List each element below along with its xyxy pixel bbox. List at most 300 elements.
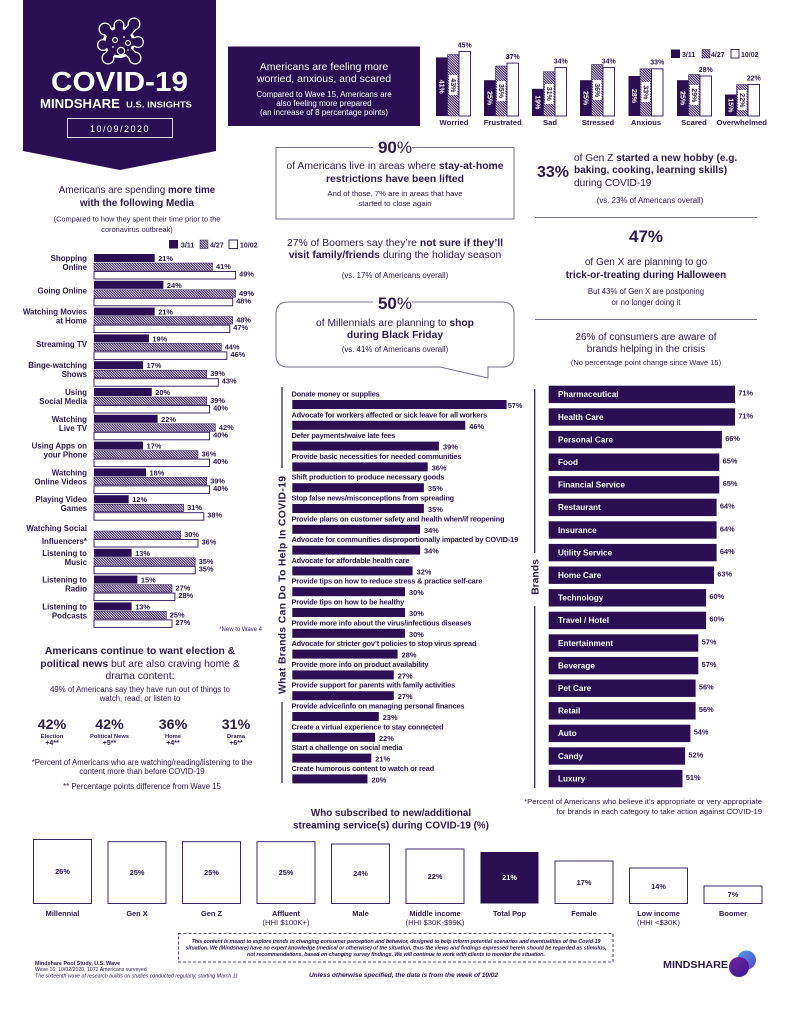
- heading: streaming: Who subscribed to new/additional: [311, 808, 471, 819]
- date box: 10/09/2020: [90, 124, 150, 134]
- axis title: What Brands Can Do To Help In COVID-19: [278, 476, 288, 694]
- row: parents: Provide support for parents with family activities: [292, 681, 455, 690]
- item: total pop: Total Pop: [493, 909, 527, 918]
- group: stressed: [580, 58, 617, 127]
- panel: election and political news: 49% of Americans say they have run out of things to: [50, 685, 231, 694]
- row: shopping online: Online: [62, 263, 88, 272]
- item: middle income: [406, 849, 465, 927]
- row: streaming tv: 19%: [152, 334, 168, 343]
- heading: streaming: streaming service(s) during COVID-19 (%): [293, 820, 489, 832]
- legend: 3/11: [682, 52, 695, 59]
- group: sad: 31%: [545, 87, 552, 102]
- footnotes: ** Percentage points difference from Wave 15: [63, 782, 222, 791]
- item: gen x: Gen X: [126, 909, 148, 918]
- row: video games: 38%: [207, 511, 223, 520]
- panel: 50 percent speech bubble: during Black Friday: [347, 330, 443, 341]
- disclaimer box: not recommendations, based on changing survey findings. We will continue to work with clients to monitor the situation.: [247, 952, 546, 958]
- bar chart: media time: [23, 240, 263, 633]
- panel: feelings message: Compared to Wave 15, Americans are: [256, 90, 392, 99]
- row: going online: Going Online: [37, 286, 88, 295]
- row: binge-watching: 43%: [222, 377, 237, 386]
- row: social influencers: [26, 524, 217, 547]
- panel: gen x halloween: But 43% of Gen X are postponing: [588, 287, 704, 296]
- stat: election: [38, 717, 67, 747]
- stat: home: 36%: [159, 717, 188, 733]
- row: shopping online: 49%: [239, 270, 254, 278]
- chart: streaming squares: [34, 840, 762, 927]
- row: retail: [549, 702, 714, 720]
- bar chart: brands: [524, 386, 762, 816]
- group: anxious: Anxious: [631, 118, 661, 127]
- row: shopping online: Shopping: [51, 254, 87, 263]
- row: utility service: [549, 544, 735, 561]
- row: reduce stress: Provide tips on how to reduce stress & practice self-care: [292, 577, 482, 586]
- stat: political news: [90, 717, 129, 747]
- row: candy: 52%: [688, 750, 704, 759]
- row: home care: [549, 566, 733, 584]
- row: workers: [292, 410, 487, 431]
- group: stressed: Stressed: [582, 118, 615, 127]
- row: binge-watching: [28, 361, 237, 386]
- row: movies: at Home: [56, 317, 88, 326]
- row: apps: 36%: [202, 450, 217, 459]
- item: millennial: 26%: [55, 867, 70, 876]
- row: utility service: Utility Service: [558, 548, 613, 557]
- group: scared: 29%: [690, 88, 697, 103]
- group: overwhelmed: [716, 75, 767, 127]
- panel: gen x halloween: [535, 218, 757, 320]
- bar chart: feelings: [436, 42, 767, 127]
- text block: consumers aware: brands helping in the crisis: [587, 344, 705, 355]
- panel: 90 percent callout: restrictions have been lifted: [326, 174, 464, 185]
- row: music: 13%: [135, 549, 150, 558]
- row: virus info: 30%: [409, 630, 424, 639]
- row: affordable health: [292, 556, 432, 576]
- row: parents: 27%: [398, 692, 413, 701]
- item: female: [555, 861, 613, 918]
- stat: drama: [222, 717, 251, 747]
- row: entertainment: [549, 634, 717, 652]
- row: movies: 21%: [158, 308, 173, 317]
- row: radio: 15%: [141, 576, 156, 585]
- group: worried: Worried: [440, 118, 469, 127]
- row: insurance: Insurance: [558, 526, 597, 535]
- row: be healthy: Provide tips on how to be healthy: [292, 598, 405, 606]
- group: stressed: 34%: [602, 58, 617, 65]
- row: social media: 20%: [155, 388, 171, 397]
- footnotes: [32, 758, 252, 791]
- legend: 10/02: [240, 242, 258, 250]
- row: radio: [42, 576, 194, 601]
- footnote: for brands in each category to take action against COVID-19: [556, 807, 762, 816]
- row: apps: [32, 442, 228, 467]
- row: product availability: [292, 660, 429, 680]
- row: stricter policies: Advocate for stricter gov’t policies to stop virus spread: [292, 639, 477, 648]
- panel: 50 percent speech bubble: of Millennials are planning to shop: [316, 318, 474, 329]
- legend: [169, 240, 258, 250]
- panel: gen z hobby: of Gen Z started a new hobby (e.g.: [574, 153, 737, 164]
- row: social media: 40%: [213, 404, 228, 412]
- panel: media intro: with the following Media: [79, 198, 195, 209]
- row: virtual experience: 22%: [379, 734, 394, 743]
- row: food: Food: [558, 458, 578, 467]
- row: movies: Watching Movies: [23, 308, 88, 317]
- row: online videos: 18%: [150, 468, 165, 477]
- row: podcasts: 27%: [176, 618, 191, 627]
- header banner: [23, 0, 216, 170]
- row: stricter policies: [292, 639, 477, 660]
- item: boomer: [704, 886, 762, 918]
- footnotes: content more than before COVID-19: [79, 767, 205, 776]
- row: defer: [292, 431, 458, 452]
- row: donate: [292, 390, 523, 410]
- row: pharmaceutical: 71%: [738, 389, 754, 398]
- stat: drama: Drama: [227, 734, 246, 740]
- panel: feelings message: Americans are feeling more: [260, 61, 388, 73]
- row: music: 35%: [199, 557, 214, 566]
- panel: 90 percent callout: started to close again: [358, 199, 432, 208]
- row: production: Shift production to produce necessary goods: [292, 473, 444, 482]
- row: travel hotel: 60%: [709, 615, 725, 624]
- row: pharmaceutical: Pharmaceutical: [558, 390, 619, 399]
- item: total pop: 21%: [502, 873, 517, 882]
- row: retail: Retail: [558, 707, 580, 716]
- row: humorous: [292, 764, 435, 784]
- item: low income: [630, 868, 688, 927]
- row: food: 65%: [723, 456, 738, 466]
- row: stricter policies: 28%: [402, 651, 417, 660]
- row: beverage: 57%: [702, 660, 717, 669]
- disclaimer box: [178, 934, 613, 962]
- row: virus info: Provide more info about the virus/infectious diseases: [292, 618, 472, 627]
- item: low income: Low income: [637, 909, 680, 918]
- group: overwhelmed: 22%: [738, 93, 745, 108]
- row: workers: Advocate for workers affected or sick leave for all workers: [292, 410, 487, 419]
- row: music: [42, 549, 214, 574]
- panel: 90 percent callout: And of those, 7% are in areas that have: [327, 189, 463, 198]
- group: frustrated: 35%: [497, 84, 504, 99]
- group: stressed: 36%: [593, 83, 600, 98]
- row: video games: 12%: [132, 495, 147, 504]
- row: pet care: [549, 680, 714, 697]
- text block: boomers: visit family/friends during the holiday season: [289, 250, 501, 261]
- row: apps: 17%: [147, 442, 162, 451]
- row: going online: 48%: [236, 296, 251, 305]
- row: insurance: [549, 521, 735, 539]
- row: binge-watching: Binge-watching: [28, 361, 87, 370]
- row: radio: 27%: [176, 584, 191, 593]
- row: candy: Candy: [558, 752, 583, 761]
- group: scared: Scared: [681, 118, 707, 127]
- row: social media: 39%: [210, 396, 225, 405]
- text block: consumers aware: (No percentage point change since Wave 15): [571, 358, 722, 367]
- row: personal care: [549, 431, 740, 448]
- legend: 3/11: [181, 242, 194, 250]
- item: male: 24%: [353, 869, 368, 878]
- legend: 4/27: [210, 242, 224, 250]
- row: video games: 31%: [187, 503, 202, 512]
- panel: media intro: coronavirus outbreak): [101, 225, 173, 234]
- footnotes: *Percent of Americans who are watching/reading/listening to the: [32, 758, 252, 767]
- row: video games: Playing Video: [35, 495, 87, 504]
- row: pharmaceutical: [549, 386, 754, 403]
- row: reduce stress: 30%: [409, 588, 424, 597]
- disclaimer box: situation. We (Mindshare) have no expert knowledge (medical or otherwise) of the situation, thus the views and findings expressed herein should be regarded as stimulus,: [186, 946, 607, 952]
- disclaimer box: This content is meant to explore trends in changing consumer perception and behavior, designed to help inform potential scenarios and eventualities of the Covid-19: [192, 939, 600, 945]
- row: home care: 63%: [717, 570, 733, 578]
- row: financial service: [549, 476, 738, 494]
- row: entertainment: Entertainment: [558, 639, 613, 648]
- row: personal care: Personal Care: [558, 435, 614, 444]
- row: communities: Advocate for communities disproportionally impacted by COVID-19: [292, 535, 518, 544]
- row: travel hotel: Travel / Hotel: [558, 616, 609, 625]
- stat: political news: +5**: [103, 740, 116, 747]
- group: overwhelmed: 15%: [726, 98, 733, 113]
- group: overwhelmed: 22%: [747, 75, 762, 82]
- row: radio: Radio: [65, 585, 87, 594]
- row: production: 35%: [428, 484, 443, 493]
- stat: home: [159, 717, 188, 747]
- row: podcasts: 25%: [170, 610, 185, 619]
- group: scared: 28%: [699, 67, 714, 74]
- item: total pop: [480, 852, 538, 918]
- row: insurance: 64%: [720, 524, 735, 533]
- group: worried: 45%: [458, 42, 473, 50]
- row: entertainment: 57%: [702, 637, 717, 646]
- source notes: The sixteenth wave of research builds on studies conducted regularly, starting March 11: [35, 974, 238, 980]
- row: be healthy: [292, 598, 424, 618]
- panel: election and political news: Americans continue to want election &: [45, 646, 236, 657]
- footnote: [524, 797, 762, 816]
- group: sad: Sad: [543, 118, 557, 127]
- source notes: Wave 16: 10/02/2020, 1072 Americans surveyed: [35, 967, 147, 973]
- row: binge-watching: 17%: [147, 361, 162, 370]
- row: shopping online: 21%: [158, 254, 173, 263]
- row: luxury: [549, 770, 701, 787]
- row: technology: 60%: [709, 592, 725, 601]
- row: apps: 40%: [213, 457, 228, 466]
- row: affordable health: 32%: [417, 567, 432, 576]
- row: pet care: Pet Care: [558, 684, 592, 693]
- row: technology: [549, 589, 725, 606]
- logo: mindshare: MINDSHARE: [663, 959, 728, 971]
- row: personal care: 66%: [725, 434, 740, 443]
- row: challenge: 21%: [375, 755, 391, 764]
- group: worried: 41%: [437, 80, 444, 94]
- row: affordable health: Advocate for affordable health care: [292, 556, 410, 565]
- item: female: 17%: [577, 878, 592, 887]
- row: podcasts: [42, 602, 191, 627]
- row: parents: [292, 681, 455, 701]
- row: live tv: Live TV: [59, 424, 88, 433]
- row: going online: [37, 281, 254, 306]
- row: financial service: Financial Service: [558, 481, 625, 490]
- row: social influencers: 30%: [184, 530, 199, 539]
- row: social influencers: 36%: [202, 538, 217, 546]
- item: millennial: Millennial: [46, 909, 79, 918]
- panel: gen z hobby: [537, 153, 737, 205]
- icon: virus: [97, 18, 144, 64]
- row: going online: 49%: [239, 289, 254, 298]
- row: virus info: [292, 618, 472, 639]
- row: finances: 23%: [383, 713, 398, 722]
- date box: [68, 118, 172, 138]
- group: sad: [532, 58, 569, 127]
- panel: gen z hobby: (vs. 23% of Americans overall): [597, 196, 704, 205]
- title: COVID-19: [51, 66, 188, 97]
- row: shopping online: 41%: [216, 262, 231, 271]
- row: online videos: [35, 468, 228, 493]
- row: online videos: 40%: [213, 484, 228, 493]
- panel: election and political news: watch, read, or listen to: [99, 694, 181, 703]
- row: radio: 28%: [178, 591, 194, 600]
- legend: 4/27: [711, 52, 725, 59]
- panel: gen z hobby: baking, cooking, learning skills): [574, 165, 727, 176]
- row: virtual experience: [292, 722, 444, 743]
- row: auto: [549, 725, 709, 742]
- footnote: *Percent of Americans who believe it’s appropriate or very appropriate: [524, 797, 762, 806]
- stat: election: 42%: [38, 717, 67, 733]
- item: boomer: Boomer: [719, 909, 747, 918]
- row: video games: Games: [61, 504, 88, 513]
- group: anxious: 28%: [630, 89, 637, 104]
- panel: 90 percent callout: [276, 138, 514, 219]
- row: online videos: Watching: [52, 468, 87, 477]
- text block: boomers: (vs. 17% of Americans overall): [342, 271, 449, 280]
- row: music: 35%: [199, 564, 214, 573]
- row: reduce stress: [292, 577, 482, 597]
- item: low income: (HHI <$30K): [637, 918, 680, 927]
- group: stressed: 25%: [581, 91, 588, 106]
- row: safety plans: 34%: [424, 526, 439, 535]
- panel: election and political news: political news but are also craving home &: [40, 659, 240, 670]
- item: middle income: 22%: [428, 872, 443, 881]
- row: utility service: 64%: [720, 547, 735, 556]
- text block: consumers aware: 26% of consumers are aware of: [575, 332, 717, 343]
- panel: 90 percent callout: of Americans live in areas where stay-at-home: [286, 161, 504, 172]
- row: live tv: 40%: [213, 430, 228, 439]
- stat: home: +4**: [166, 740, 180, 747]
- item: affluent: [257, 842, 315, 927]
- item: boomer: 7%: [728, 890, 739, 899]
- panel: feelings message: worried, anxious, and scared: [256, 73, 391, 85]
- panel: gen x halloween: or no longer doing it: [612, 298, 681, 307]
- item: gen z: Gen Z: [201, 909, 222, 918]
- row: streaming tv: [36, 334, 246, 359]
- group: scared: 25%: [678, 91, 685, 106]
- row: luxury: Luxury: [558, 774, 586, 783]
- item: low income: 14%: [651, 882, 666, 891]
- row: video games: [35, 495, 223, 520]
- row: going online: 24%: [167, 281, 182, 290]
- row: humorous: Create humorous content to watch or read: [292, 764, 435, 773]
- row: health care: Health Care: [558, 413, 604, 422]
- group: frustrated: 37%: [506, 54, 521, 61]
- row: workers: 46%: [469, 422, 485, 431]
- stat: political news: Political News: [90, 734, 129, 740]
- row: restaurant: [549, 499, 735, 516]
- row: false news: [292, 494, 455, 514]
- row: humorous: 20%: [372, 775, 387, 784]
- group: frustrated: [484, 54, 522, 127]
- row: social media: Using: [65, 388, 87, 397]
- group: anxious: 33%: [641, 85, 648, 100]
- row: challenge: Start a challenge on social media: [292, 743, 403, 752]
- item: affluent: (HHI $100K+): [262, 918, 310, 927]
- source notes: [35, 961, 238, 980]
- note: new to wave: *New to Wave 4: [219, 627, 263, 633]
- row: financial service: 65%: [723, 479, 738, 488]
- panel: election and political news: drama content:: [106, 671, 174, 682]
- row: restaurant: 64%: [720, 502, 735, 511]
- stat: election: +4**: [45, 740, 59, 747]
- row: safety plans: Provide plans on customer safety and health when/if reopening: [292, 514, 505, 523]
- row: retail: 56%: [699, 705, 714, 714]
- text block: consumers aware: [571, 332, 722, 367]
- item: millennial: [34, 840, 92, 918]
- row: binge-watching: Shows: [62, 370, 88, 379]
- item: gen x: [108, 842, 166, 918]
- row: health care: [549, 408, 754, 426]
- group: frustrated: Frustrated: [484, 118, 522, 127]
- row: necessities: Provide basic necessities for needed communities: [292, 452, 462, 461]
- row: streaming tv: Streaming TV: [36, 340, 88, 349]
- item: middle income: (HHI $30K-$99K): [406, 918, 465, 927]
- row: restaurant: Restaurant: [558, 503, 601, 512]
- stat: drama: 31%: [222, 717, 251, 733]
- row: podcasts: 13%: [135, 602, 150, 611]
- item: affluent: 25%: [279, 868, 294, 877]
- panel: gen x halloween: 47%: [629, 227, 663, 246]
- row: donate: Donate money or supplies: [292, 390, 380, 398]
- row: necessities: [292, 452, 462, 472]
- row: apps: your Phone: [44, 451, 88, 460]
- logo: mindshare: [663, 950, 756, 977]
- legend: [671, 50, 759, 59]
- row: health care: 71%: [738, 411, 754, 420]
- row: live tv: [52, 415, 234, 440]
- panel: gen z hobby: during COVID-19: [574, 178, 652, 189]
- row: luxury: 51%: [686, 773, 701, 782]
- row: communities: 34%: [424, 547, 439, 556]
- group: anxious: 33%: [650, 60, 665, 67]
- row: production: [292, 473, 444, 493]
- row: finances: Provide advice/info on managing personal finances: [292, 702, 464, 710]
- row: pet care: 56%: [699, 682, 714, 692]
- row: streaming tv: 46%: [230, 350, 246, 359]
- row: false news: 35%: [428, 505, 443, 514]
- heading: streaming: [293, 808, 489, 832]
- source notes: Mindshare Pool Study, U.S. Wave: [35, 961, 120, 967]
- row: safety plans: [292, 514, 505, 535]
- group: worried: [436, 42, 473, 127]
- row: auto: 54%: [694, 728, 709, 737]
- row: home care: Home Care: [558, 571, 602, 580]
- item: male: Male: [352, 909, 369, 918]
- row: challenge: [292, 743, 403, 764]
- row: online videos: Online Videos: [35, 477, 88, 486]
- row: necessities: 36%: [432, 463, 447, 472]
- row: movies: [23, 308, 251, 333]
- data note: Unless otherwise specified, the data is from the week of 10/02: [309, 972, 498, 979]
- panel: 50 percent speech bubble: [276, 294, 514, 378]
- row: shopping online: [51, 254, 254, 279]
- row: social media: [39, 388, 228, 413]
- row: auto: Auto: [558, 729, 577, 738]
- row: podcasts: Podcasts: [52, 611, 88, 620]
- row: movies: 47%: [233, 323, 249, 332]
- panel: 50 percent speech bubble: (vs. 41% of Americans overall): [342, 345, 449, 354]
